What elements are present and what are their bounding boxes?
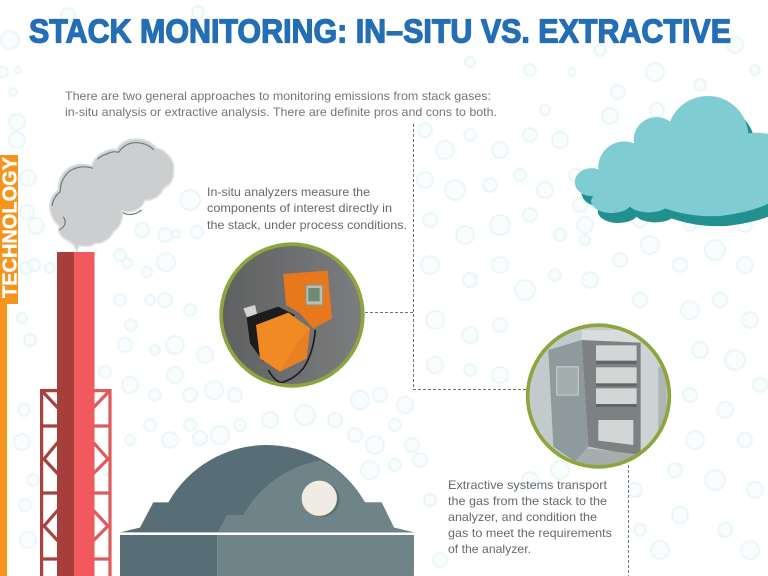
lower orange box xyxy=(256,313,310,372)
dome window xyxy=(302,481,337,516)
in-situ description xyxy=(207,185,407,232)
in-situ description: In-situ analyzers measure the xyxy=(207,185,370,199)
technology side tab: TECHNOLOGY xyxy=(0,156,22,298)
extractive description: Extractive systems transport xyxy=(448,478,608,492)
extractive description: of the analyzer. xyxy=(448,542,531,556)
teal cloud xyxy=(575,96,768,226)
in-situ analyzer photo xyxy=(217,240,367,390)
tower lattice left xyxy=(42,391,58,576)
intro text: There are two general approaches to monitoring emissions from stack gases: xyxy=(65,89,491,103)
intro text xyxy=(65,89,497,119)
smoke plume xyxy=(50,139,174,251)
dashed connector lines xyxy=(365,124,628,576)
stack column xyxy=(57,252,94,576)
storage dome xyxy=(120,445,414,576)
extractive description xyxy=(448,478,612,556)
intro text: in-situ analysis or extractive analysis. There are definite pros and cons to both. xyxy=(65,105,497,119)
black mount xyxy=(247,307,295,362)
tower lattice right xyxy=(93,391,110,576)
cabinet interior xyxy=(582,340,641,457)
extractive description: gas to meet the requirements xyxy=(448,526,612,540)
extractive description: the gas from the stack to the xyxy=(448,494,607,508)
nozzle xyxy=(243,305,257,318)
smokestack xyxy=(42,252,110,576)
extractive description: analyzer, and condition the xyxy=(448,510,597,524)
in-situ description: components of interest directly in xyxy=(207,201,392,215)
technology side tab xyxy=(0,155,22,576)
cable xyxy=(268,330,315,383)
rack units xyxy=(596,345,637,445)
in-situ description: the stack, under process conditions. xyxy=(207,218,407,232)
title: STACK MONITORING: IN–SITU VS. EXTRACTIVE xyxy=(29,12,731,50)
extractive system photo xyxy=(523,320,673,470)
cabinet door xyxy=(548,340,588,462)
upper orange enclosure xyxy=(283,271,332,329)
cabinet floor xyxy=(576,448,636,465)
